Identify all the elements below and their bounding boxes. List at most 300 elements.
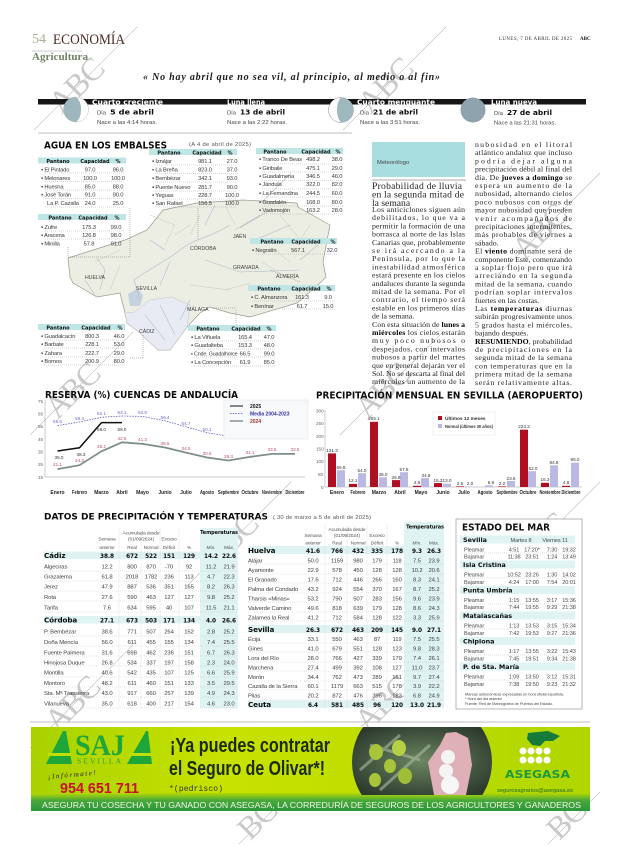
table: Pintado block: 91.0 xyxy=(85,192,95,198)
month labels: Junio xyxy=(158,490,172,496)
table: Huelva, Sevilla and Ceuta: 60.1 xyxy=(307,684,319,690)
table: Huelva, Sevilla and Ceuta: 3.3 xyxy=(413,616,422,622)
table: Iznájar block: 342.1 xyxy=(198,176,212,182)
article headline: Probabilidad de lluvia xyxy=(372,181,463,192)
moon text: new: 27 de abril xyxy=(507,109,552,117)
bars: last 12 months xyxy=(328,422,570,487)
tide rows: Sevilla: 1:24 xyxy=(547,554,557,560)
moon text: last quarter: Nace a las 3:51 horas. xyxy=(360,120,420,126)
table: Huelva, Sevilla and Ceuta: 8.6 xyxy=(413,606,422,612)
table: Iznájar block: 281.7 xyxy=(198,185,212,191)
table: Cádiz and Córdoba: 2.8 xyxy=(207,630,216,636)
table: Huelva, Sevilla and Ceuta: 499 xyxy=(332,666,342,672)
table: La Viñuela block: 48.0 xyxy=(264,343,274,349)
month labels: Septiembre xyxy=(218,490,239,496)
tide rows: Matalascañas: Pleamar xyxy=(464,624,484,630)
table: Tranco block: 46.0 xyxy=(332,174,342,180)
moon text: first quarter: Cuarto creciente xyxy=(92,98,163,106)
tide rows: Isla Cristina: Pleamar xyxy=(464,572,484,578)
table: Iznájar block: ▪ San Rafael xyxy=(152,201,183,207)
table: Guadalcacín block: ▪ Guadalcacín xyxy=(41,334,75,340)
bar value labels: 6.8 xyxy=(488,480,495,485)
tide rows: Sevilla: 4:51 xyxy=(509,548,519,554)
month labels: Enero xyxy=(50,490,65,496)
tide rows: Punta Umbría: 19:55 xyxy=(525,605,539,611)
article body column 2: atlántico andaluz que incluso xyxy=(475,148,572,157)
table: Huelva, Sevilla and Ceuta: 396 xyxy=(372,694,383,700)
table: Cádiz and Córdoba: Montoro xyxy=(44,681,66,687)
tide rows: Sevilla: 7:30 xyxy=(547,548,557,554)
table: Cádiz and Córdoba xyxy=(44,528,238,708)
table: Tranco block: 244.5 xyxy=(306,191,320,197)
table: La Viñuela block: 47.0 xyxy=(264,335,274,341)
bar value labels: 2.2 xyxy=(499,481,506,486)
table: Cádiz and Córdoba: 125 xyxy=(184,670,195,676)
table: Tranco block: 29.0 xyxy=(332,166,342,172)
table: Tranco block: Capacidad xyxy=(301,149,331,155)
table: Huelva, Sevilla and Ceuta: Gines xyxy=(248,646,263,652)
article body column 2: con temperaturas que en la xyxy=(475,361,573,370)
table: Pintado block: 100.0 xyxy=(83,176,97,182)
series: average 2004-2023: 50.1 xyxy=(203,427,212,432)
table: Guadalcacín block: 228.1 xyxy=(85,342,99,348)
tide rows: Isla Cristina: 20:01 xyxy=(562,580,576,586)
table: Cádiz and Córdoba: 337 xyxy=(146,660,156,666)
table: Cádiz and Córdoba: 9.8 xyxy=(207,595,216,601)
table: Cádiz and Córdoba: 151 xyxy=(163,554,175,560)
table: Tranco block xyxy=(256,148,343,214)
tide rows: Puerto de Santa María: 1:09 xyxy=(509,674,519,680)
article body column 1: muy poco nubosos o xyxy=(372,336,465,345)
series: 2024: 38.5 xyxy=(161,441,170,446)
table: Cádiz and Córdoba: Cádiz xyxy=(44,551,65,560)
table: Tranco block: ▪ Giribaile xyxy=(259,166,282,172)
tide rows: Sevilla: Viernes 11 xyxy=(542,538,568,544)
heading: sea state: ESTADO DEL MAR xyxy=(462,522,551,534)
table: Cádiz and Córdoba: 107 xyxy=(184,606,194,612)
table: Cádiz and Córdoba: 158 xyxy=(184,660,195,666)
table: Huelva, Sevilla and Ceuta: 7.5 xyxy=(413,558,422,564)
table: Cádiz and Córdoba: -70 xyxy=(165,564,174,570)
ad photo: olives and hail xyxy=(350,727,495,795)
table: Huelva, Sevilla and Ceuta: 209 xyxy=(371,628,383,634)
table: Iznájar block: ▪ Bembézar xyxy=(152,176,181,182)
article body column 1: Con esta situación de lunes a xyxy=(372,320,465,329)
table: Cádiz and Córdoba: Real xyxy=(127,545,137,551)
table: Huelva, Sevilla and Ceuta: 26.3 xyxy=(306,628,320,634)
watermarks: ABC xyxy=(195,196,265,266)
article body column 1: estará presente en los cielos xyxy=(372,271,465,280)
tide rows: Isla Cristina: Bajamar xyxy=(464,580,484,586)
month labels: Febrero xyxy=(350,490,366,496)
watermarks: ABC xyxy=(504,505,574,575)
moon text: last quarter: Cuarto menguante xyxy=(357,98,435,106)
ad headline: *(pedrisco) xyxy=(169,785,223,794)
table: Cádiz and Córdoba: Déficit xyxy=(163,545,176,551)
table: Huelva, Sevilla and Ceuta: 550 xyxy=(332,637,343,643)
table: Cádiz and Córdoba: Montilla xyxy=(44,670,64,676)
ad call to action: ¡Infórmate! xyxy=(47,769,97,781)
table: Pintado block: Capacidad xyxy=(80,159,110,165)
table: Huelva, Sevilla and Ceuta: 554 xyxy=(353,587,364,593)
article body column 1: borrasca al norte de las Islas xyxy=(372,230,465,239)
article headline: en la segunda mitad de xyxy=(372,190,464,200)
table: Huelva, Sevilla and Ceuta: 96 xyxy=(373,703,381,709)
table: Cádiz and Córdoba: 460 xyxy=(146,681,157,687)
logo: ASEGASA: segurosagrarios@asegasa.es xyxy=(497,788,573,794)
city labels: ALMERÍA xyxy=(276,273,299,280)
article body column 2: serán relativamente altas. xyxy=(475,378,572,387)
y axis: 250 xyxy=(316,421,324,426)
table: Cádiz and Córdoba: 217 xyxy=(164,702,174,708)
table: Huelva, Sevilla and Ceuta: 33.1 xyxy=(307,637,319,643)
y axis: 15 xyxy=(38,475,44,480)
table: La Viñuela block: Pantano xyxy=(196,326,220,332)
table: Cádiz and Córdoba: 542 xyxy=(127,670,137,676)
article body column 1: nubosos a partir del martes xyxy=(372,353,465,362)
watermarks: ABC xyxy=(350,50,420,120)
tide rows: Matalascañas xyxy=(463,612,576,637)
heading: rainfall: PRECIPITACIÓN MENSUAL EN SEVILLA (AEROPUERTO) xyxy=(316,388,583,402)
article body column 2: segunda mitad de la semana xyxy=(475,353,573,362)
table: Pintado block xyxy=(38,158,126,207)
series: average 2004-2023: 62.1 xyxy=(97,411,106,416)
tide rows: Sevilla: 23:51 xyxy=(525,554,539,560)
table: Huelva, Sevilla and Ceuta: 24.3 xyxy=(428,606,440,612)
table: Cádiz and Córdoba: 24.3 xyxy=(223,691,235,697)
tide rows: Isla Cristina xyxy=(463,561,576,586)
table: Cádiz and Córdoba: 43.0 xyxy=(101,691,113,697)
tide rows: Puerto de Santa María: 7:38 xyxy=(509,682,519,688)
tide rows: Punta Umbría: 9:29 xyxy=(547,605,557,611)
article body column 1: mitad de la semana. Por el xyxy=(372,287,466,296)
article body column 1: inestabilidad atmosférica xyxy=(372,262,466,271)
moon text: last quarter xyxy=(357,98,435,126)
table: Huelva, Sevilla and Ceuta: 432 xyxy=(352,549,364,555)
table: Huelva, Sevilla and Ceuta: 679 xyxy=(332,646,342,652)
table: Huelva, Sevilla and Ceuta: 26.1 xyxy=(428,656,440,662)
table: Zufre block: 175.3 xyxy=(82,225,96,231)
tide rows: Punta Umbría: 13:55 xyxy=(525,598,539,604)
table: Huelva, Sevilla and Ceuta: 22.2 xyxy=(428,684,440,690)
month labels: Abril xyxy=(116,490,128,496)
moon: first quarter xyxy=(64,97,88,122)
table: Huelva, Sevilla and Ceuta: 339 xyxy=(372,656,382,662)
table: Cádiz and Córdoba: Acumulada desde xyxy=(123,530,160,536)
table: Tranco block: Pantano xyxy=(263,149,287,155)
ad headline: ¡Ya puedes contratar xyxy=(170,735,330,757)
table: Huelva, Sevilla and Ceuta: 23.7 xyxy=(428,666,440,672)
table: Cádiz and Córdoba: 139 xyxy=(184,691,194,697)
y axis: 50 xyxy=(318,472,324,477)
table: Huelva, Sevilla and Ceuta: 179 xyxy=(392,656,402,662)
table: Guadalcacín block xyxy=(38,324,125,365)
series: 2024: 21.1 xyxy=(53,462,62,467)
table: Huelva, Sevilla and Ceuta: 145 xyxy=(391,628,403,634)
article body column 1: andaluces durante la segunda xyxy=(372,279,466,288)
table: Tranco block: 168.0 xyxy=(306,200,320,206)
table: Negratín block: 32.0 xyxy=(327,248,337,254)
tide notes xyxy=(465,692,564,706)
month labels: Octubre xyxy=(242,490,259,496)
article body column 2: día. De jueves a domingo se xyxy=(475,173,573,182)
tide rows: Isla Cristina: 7:54 xyxy=(547,580,557,586)
moon: new xyxy=(460,98,486,122)
series: average 2004-2023: 54.7 xyxy=(182,421,191,426)
series: average 2004-2023: 47.6 xyxy=(268,430,277,435)
bar value labels: 95.0 xyxy=(571,457,580,462)
table: Guadalcacín block: Pantano xyxy=(46,325,70,331)
table: Huelva, Sevilla and Ceuta: Déficit xyxy=(371,540,384,546)
table: Huelva, Sevilla and Ceuta: 20.6 xyxy=(428,568,440,574)
bar value labels: 26.9 xyxy=(392,475,401,480)
table: Cádiz and Córdoba: 21.9 xyxy=(223,564,235,570)
article body column 1 xyxy=(372,205,466,386)
article body column 1: Los anticiclones siguen aún xyxy=(372,205,465,214)
table: Zufre block xyxy=(38,214,126,248)
month labels: Julio xyxy=(180,490,192,496)
table: Pintado block: 85.0 xyxy=(85,184,95,190)
tide rows: Isla Cristina: 23:26 xyxy=(525,572,539,578)
tide rows: Punta Umbría: 7:44 xyxy=(509,605,519,611)
logo: ASEGASA xyxy=(497,731,573,794)
table: Huelva, Sevilla and Ceuta: 128 xyxy=(372,616,383,622)
watermarks: ABC xyxy=(37,668,107,738)
article body column 2: bajando después. xyxy=(475,329,528,338)
tide rows: Matalascañas: 13:53 xyxy=(525,624,539,630)
table: Cádiz and Córdoba: 6.7 xyxy=(207,650,215,656)
table: Cádiz and Córdoba: 22.3 xyxy=(223,574,235,580)
table: Huelva, Sevilla and Ceuta: 27.4 xyxy=(428,675,440,681)
table: Cádiz and Córdoba: 25.5 xyxy=(223,640,235,646)
table: Cádiz and Córdoba: 27.6 xyxy=(101,595,113,601)
table: Cádiz and Córdoba: 236 xyxy=(164,574,175,580)
moon text: new xyxy=(491,98,557,126)
table: Huelva, Sevilla and Ceuta: Temperaturas xyxy=(406,524,444,530)
heading: reservoirs: AGUA EN LOS EMBALSES xyxy=(44,140,167,152)
series: 2024: 33.5 xyxy=(268,447,277,452)
table: Cádiz and Córdoba: Córdoba xyxy=(44,616,77,624)
tide rows: Matalascañas: Bajamar xyxy=(464,631,484,637)
bar value labels: 23.6 xyxy=(507,476,516,481)
series: 2024: 34.5 xyxy=(182,446,191,451)
table: Iznájar block: 27.0 xyxy=(227,159,237,165)
table: Cádiz and Córdoba: 61.8 xyxy=(101,574,113,580)
table: La Viñuela block: 66.5 xyxy=(240,352,250,358)
table: Cádiz and Córdoba: 6.6 xyxy=(207,670,216,676)
table: Cádiz and Córdoba: 257 xyxy=(164,691,174,697)
city labels: JAÉN xyxy=(233,233,247,240)
table: Huelva, Sevilla and Ceuta: 43.2 xyxy=(307,587,319,593)
month labels: Noviembre xyxy=(540,490,561,496)
table: La Viñuela block: 85.0 xyxy=(264,360,274,366)
article body column 2: venir acompañados de xyxy=(475,214,573,223)
table: Tranco block: ▪ Guadalén xyxy=(259,200,286,206)
article body column 2: RESUMIENDO, probabilidad xyxy=(475,337,572,346)
table: Huelva, Sevilla and Ceuta: 118 xyxy=(392,558,402,564)
watermarks: BC xyxy=(230,792,284,846)
table: Huelva, Sevilla and Ceuta: 427 xyxy=(353,656,363,662)
table: Huelva, Sevilla and Ceuta: 123 xyxy=(392,646,403,652)
article body column 2: nubosidad, alternando cielos xyxy=(475,189,572,198)
table: Zufre block: ▪ Zufre xyxy=(41,225,57,231)
table: Zufre block: 99.0 xyxy=(111,225,121,231)
tide rows: Punta Umbría: 1:15 xyxy=(509,598,519,604)
table: Huelva, Sevilla and Ceuta: 663 xyxy=(353,684,364,690)
article body column 2: primera mitad de la semana xyxy=(475,370,573,379)
tide rows: Chipiona: 3:22 xyxy=(547,649,557,655)
table: Huelva, Sevilla and Ceuta: Marchena xyxy=(248,666,274,672)
table: Huelva, Sevilla and Ceuta: 41.6 xyxy=(306,549,320,555)
tide rows: Matalascañas: Matalascañas xyxy=(463,612,512,620)
heading: reserve: RESERVA (%) CUENCAS DE ANDALUCÍA xyxy=(45,388,238,401)
series: 2025: 38.3 xyxy=(77,452,86,457)
table: Pintado block: La P. Cazalla xyxy=(47,201,80,207)
table: Huelva, Sevilla and Ceuta: El Granado xyxy=(248,578,278,584)
bar value labels xyxy=(326,416,580,486)
tide rows: Matalascañas: 15:34 xyxy=(562,624,576,630)
watermarks: ABC xyxy=(347,668,417,738)
series: average 2004-2023 xyxy=(53,410,300,437)
y axis xyxy=(316,408,582,490)
table: Huelva, Sevilla and Ceuta: 266 xyxy=(372,578,383,584)
table: Cádiz and Córdoba: Exceso xyxy=(161,536,177,542)
table: Almanzora block xyxy=(248,285,335,310)
table: Huelva, Sevilla and Ceuta: 9.7 xyxy=(413,675,421,681)
table: Iznájar block: 100.0 xyxy=(225,201,239,207)
moon text: first quarter: Día xyxy=(97,110,107,116)
article body column 1: que en general dejarán ver el xyxy=(372,361,466,370)
table: Huelva, Sevilla and Ceuta: 8.3 xyxy=(413,578,422,584)
bar value labels: 2.0 xyxy=(467,481,474,486)
table: Cádiz and Córdoba: 25.2 xyxy=(223,595,235,601)
table: Huelva, Sevilla and Ceuta: 578 xyxy=(332,568,343,574)
table: Huelva, Sevilla and Ceuta: 26.3 xyxy=(427,549,441,555)
table: Negratín block: Pantano xyxy=(260,239,284,245)
table: Cádiz and Córdoba: 618 xyxy=(127,702,138,708)
article body column 2: nubosidad en el litoral xyxy=(475,140,573,149)
series: 2024: 31.1 xyxy=(246,450,255,455)
table: Almanzora block: Pantano xyxy=(257,286,281,292)
article body column 2: 5 grados hasta el miércoles, xyxy=(475,320,572,329)
table: Huelva, Sevilla and Ceuta: 507 xyxy=(353,596,363,602)
table: Huelva, Sevilla and Ceuta: 22.9 xyxy=(307,568,319,574)
moon text: new: Nace a las 21:31 horas. xyxy=(494,120,557,126)
series: 2025: 58.0 xyxy=(97,427,106,432)
table: Huelva, Sevilla and Ceuta: 766 xyxy=(331,549,343,555)
Cádiz shaded area xyxy=(125,297,190,350)
table: Guadalcacín block: ▪ Zahara xyxy=(41,351,63,357)
table: Huelva, Sevilla and Ceuta: Valverde Camino xyxy=(248,606,292,612)
table: Huelva, Sevilla and Ceuta: 120 xyxy=(391,703,403,709)
table: Huelva, Sevilla and Ceuta: 6.8 xyxy=(413,694,422,700)
month labels: Marzo xyxy=(94,490,109,496)
chart legend: Últimos 12 meses xyxy=(445,415,486,422)
ad headline xyxy=(169,735,330,794)
table: Guadalcacín block: 800.3 xyxy=(85,334,99,340)
article body column 2: fuertes en las costas. xyxy=(475,296,539,305)
table: Cádiz and Córdoba: anterior xyxy=(99,545,115,551)
y axis: 35 xyxy=(38,450,44,454)
table: Huelva, Sevilla and Ceuta: Palma del Condado xyxy=(248,587,299,593)
table: La Viñuela block: ▪ Guadalteba xyxy=(191,343,224,349)
page number: 54 xyxy=(32,32,46,47)
table: Cádiz and Córdoba: 634 xyxy=(127,606,138,612)
table: Huelva, Sevilla and Ceuta: Huelva xyxy=(248,546,276,555)
series: average 2004-2023: 47.4 xyxy=(224,430,233,435)
series: 2024: 33.5 xyxy=(291,447,300,452)
tide rows: Isla Cristina: Isla Cristina xyxy=(463,561,506,569)
tide rows: Puerto de Santa María: 15:31 xyxy=(562,674,576,680)
table: Cádiz and Córdoba: 26.3 xyxy=(223,584,235,590)
table: Cádiz and Córdoba: 23.0 xyxy=(223,702,235,708)
table: La Viñuela block: ▪ La Viñuela xyxy=(191,335,221,341)
table: Guadalcacín block: ▪ Barbate xyxy=(41,342,64,348)
moon text: full: Nace a las 2:22 horas. xyxy=(227,120,287,126)
table: Huelva, Sevilla and Ceuta: Écija xyxy=(248,636,261,643)
panel: reservoirs xyxy=(38,140,343,366)
bar value labels: 62.0 xyxy=(529,466,538,471)
tide rows: Isla Cristina: 17:00 xyxy=(525,580,539,586)
month labels: Diciembre xyxy=(562,490,581,496)
tide rows: Sevilla: Pleamar xyxy=(464,548,484,554)
table: Huelva, Sevilla and Ceuta: Lora del Río xyxy=(248,656,280,662)
moon text: first quarter xyxy=(92,98,163,126)
table: Guadalcacín block: 222.7 xyxy=(85,351,99,357)
table: Huelva, Sevilla and Ceuta: 6.4 xyxy=(308,703,318,709)
table: Guadalcacín block: 53.0 xyxy=(114,342,124,348)
series: average 2004-2023: 63.1 xyxy=(118,410,127,415)
table: Cádiz and Córdoba: 25.9 xyxy=(223,670,235,676)
table: Huelva, Sevilla and Ceuta: 28.3 xyxy=(428,646,440,652)
section name: ECONOMÍA xyxy=(53,31,125,48)
table: Almanzora block: ▪ C. Almanzora xyxy=(251,295,288,301)
series: 2025: 58.0 xyxy=(118,427,127,432)
moon text: full: 13 de abril xyxy=(240,108,285,116)
table: Huelva, Sevilla and Ceuta: 392 xyxy=(353,666,363,672)
table: Cádiz and Córdoba: Normal xyxy=(144,545,158,551)
table: Huelva, Sevilla and Ceuta: Alájar xyxy=(248,558,263,564)
table: Cádiz and Córdoba: 236 xyxy=(164,650,175,656)
table: Cádiz and Córdoba: 127 xyxy=(164,595,174,601)
tide rows: Chipiona: 7:45 xyxy=(509,656,519,662)
chart legend xyxy=(433,412,495,435)
tide rows: Sevilla: 17:20* xyxy=(524,548,541,554)
article body column 2 xyxy=(475,140,573,387)
table: Huelva, Sevilla and Ceuta: 161 xyxy=(392,675,402,681)
table: Zufre block: ▪ Minilla xyxy=(41,242,61,248)
bar value labels: 65.8 xyxy=(337,465,346,470)
table: Huelva, Sevilla and Ceuta: 289 xyxy=(372,675,382,681)
tide rows: Chipiona: 21:38 xyxy=(562,656,576,662)
table: Cádiz and Córdoba: 771 xyxy=(127,630,137,636)
table: Cádiz and Córdoba: 800 xyxy=(127,564,138,570)
table: Huelva, Sevilla and Ceuta: 712 xyxy=(332,616,342,622)
table: Zufre block: 126.8 xyxy=(82,233,96,239)
table: Cádiz and Córdoba: 35.0 xyxy=(101,702,113,708)
table: Cádiz and Córdoba: 151 xyxy=(184,650,194,656)
bar value labels: 84.8 xyxy=(550,460,559,465)
table: Cádiz and Córdoba: 503 xyxy=(145,618,157,624)
article headline xyxy=(372,181,464,209)
table: Pintado block: 25.0 xyxy=(113,201,123,207)
article body column 2: espera un aumento de la xyxy=(475,181,573,190)
article body column 1: permitir la formación de una xyxy=(372,221,466,230)
month labels: Junio xyxy=(436,490,450,496)
table: Cádiz and Córdoba: 134 xyxy=(183,618,195,624)
watermarks: BC xyxy=(539,792,593,846)
table: Iznájar block: 90.0 xyxy=(227,185,237,191)
